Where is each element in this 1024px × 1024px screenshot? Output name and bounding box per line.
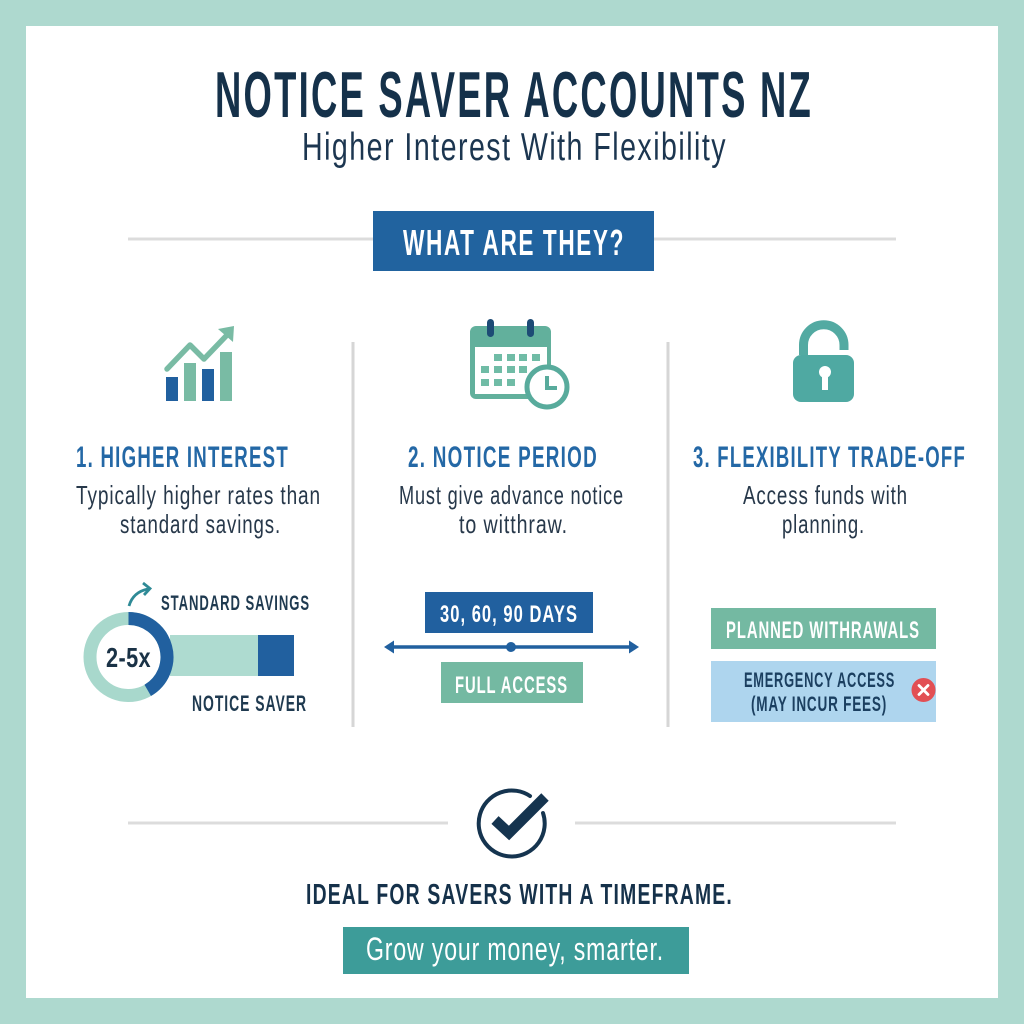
text: higher interest description: Typically higher rates than — [76, 480, 321, 510]
panel: higher interest — [76, 326, 321, 716]
label: full access — [441, 662, 583, 703]
text: flexibility description — [743, 480, 908, 539]
section banner: what are they — [373, 211, 654, 271]
label: planned withdrawals — [711, 608, 936, 649]
panel: notice period — [384, 319, 639, 703]
chart: standard savings vs notice saver: 2-5x — [106, 642, 151, 673]
section banner: what are they: WHAT ARE THEY? — [403, 222, 625, 263]
arrow: timeline — [384, 640, 639, 654]
label: 30, 60, 90 days — [425, 592, 593, 633]
chart: standard savings vs notice saver: NOTICE SAVER — [192, 691, 307, 716]
text: notice period description: Must give advance notice — [399, 480, 624, 510]
label: emergency access: (MAY INCUR FEES) — [751, 693, 887, 716]
heading: notice period: 2. NOTICE PERIOD — [408, 441, 598, 474]
text: flexibility description: Access funds with — [743, 480, 908, 510]
icon: check mark — [479, 790, 545, 856]
text: higher interest description — [76, 480, 321, 539]
icon: calendar with clock — [470, 319, 567, 407]
text: flexibility description: planning. — [782, 509, 865, 539]
heading: higher interest: 1. HIGHER INTEREST — [76, 441, 289, 474]
chart: standard savings vs notice saver: STANDARD SAVINGS — [161, 592, 310, 615]
chart: standard savings vs notice saver — [90, 583, 310, 716]
label: 30, 60, 90 days: 30, 60, 90 DAYS — [440, 601, 578, 628]
text: higher interest description: standard savings. — [120, 509, 281, 539]
icon: warning cross — [912, 678, 936, 702]
label: full access: FULL ACCESS — [455, 672, 568, 699]
callout: grow your money — [343, 927, 689, 974]
icon: padlock — [793, 325, 854, 402]
callout: grow your money: Grow your money, smarter. — [366, 931, 664, 967]
text: notice period description — [399, 480, 624, 539]
panel: flexibility trade-off — [693, 325, 966, 722]
label: emergency access: EMERGENCY ACCESS — [744, 669, 895, 692]
text: ideal for savers: IDEAL FOR SAVERS WITH A TIMEFRAME. — [306, 879, 733, 911]
subtitle: Higher Interest With Flexibility — [302, 126, 727, 169]
label: emergency access — [711, 661, 936, 722]
text: notice period description: to witthraw. — [459, 509, 568, 539]
icon: growth chart — [166, 326, 234, 401]
